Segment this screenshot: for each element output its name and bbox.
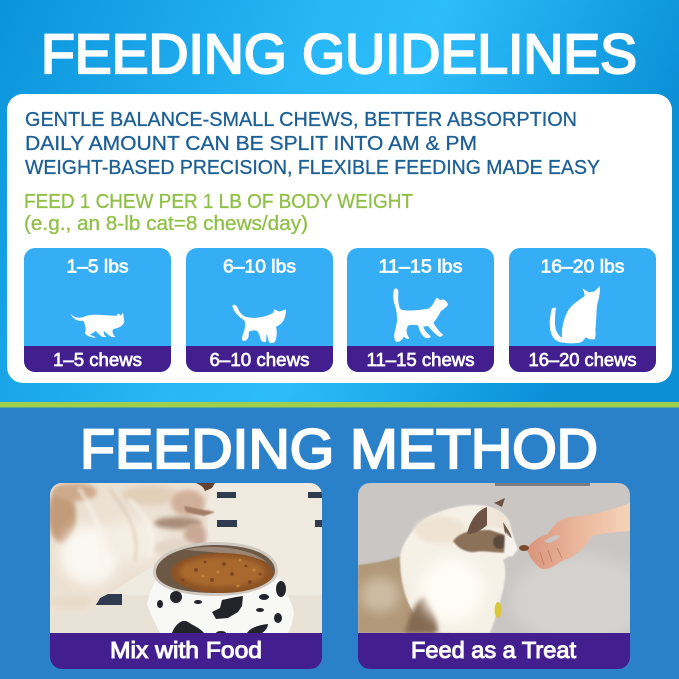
panel: guidelines [7,94,672,383]
benefits text block: DAILY AMOUNT CAN BE SPLIT INTO AM & PM [25,133,477,155]
bottom background [0,407,679,679]
caption: feed as a treat: Feed as a Treat [411,637,577,663]
cat face markings [453,530,510,553]
card: 6-10 lbs: 6–10 chews [210,350,310,370]
kibble texture [182,560,262,584]
panel: mix with food photo [48,483,322,669]
card: 6-10 lbs: 6–10 lbs [223,256,296,276]
cat fur [48,483,215,613]
card: 1-5 lbs [24,248,171,372]
cat fluffy body [358,498,518,633]
card: 6-10 lbs [186,248,333,372]
card: 16-20 lbs [509,248,656,372]
panel: feed as a treat photo [358,483,650,669]
floor tiles [96,492,322,605]
benefits text block: WEIGHT-BASED PRECISION, FLEXIBLE FEEDING MADE EASY [25,157,600,179]
card: 16-20 lbs: 16–20 chews [528,350,636,370]
icon: large cat [393,288,448,342]
cow spots [157,581,286,635]
feeding rule text block: FEED 1 CHEW PER 1 LB OF BODY WEIGHT [24,191,413,213]
green divider band [0,402,679,408]
benefits text block [25,109,600,179]
title: feeding guidelines: FEEDING GUIDELINES [41,22,637,85]
feeding rule text block: (e.g., an 8-lb cat=8 chews/day) [24,213,308,235]
card: 11-15 lbs: 11–15 chews [366,350,474,370]
caption: mix with food: Mix with Food [110,637,262,663]
icon: medium cat [232,305,286,343]
hand offering treat [519,503,630,569]
card: 1-5 lbs: 1–5 lbs [66,256,128,276]
icon: sitting cat [550,286,600,343]
benefits text block: GENTLE BALANCE-SMALL CHEWS, BETTER ABSORPTION [25,109,577,131]
card: 16-20 lbs: 16–20 lbs [540,256,624,276]
feeding rule text block [24,191,413,235]
card: 1-5 lbs: 1–5 chews [53,350,142,370]
food bowl [147,542,294,635]
top background [0,0,679,403]
fur streaks [76,486,146,562]
card: 11-15 lbs: 11–15 lbs [378,256,462,276]
icon: small cat [70,313,124,338]
card: 11-15 lbs [347,248,494,372]
title: feeding method: FEEDING METHOD [80,417,598,480]
